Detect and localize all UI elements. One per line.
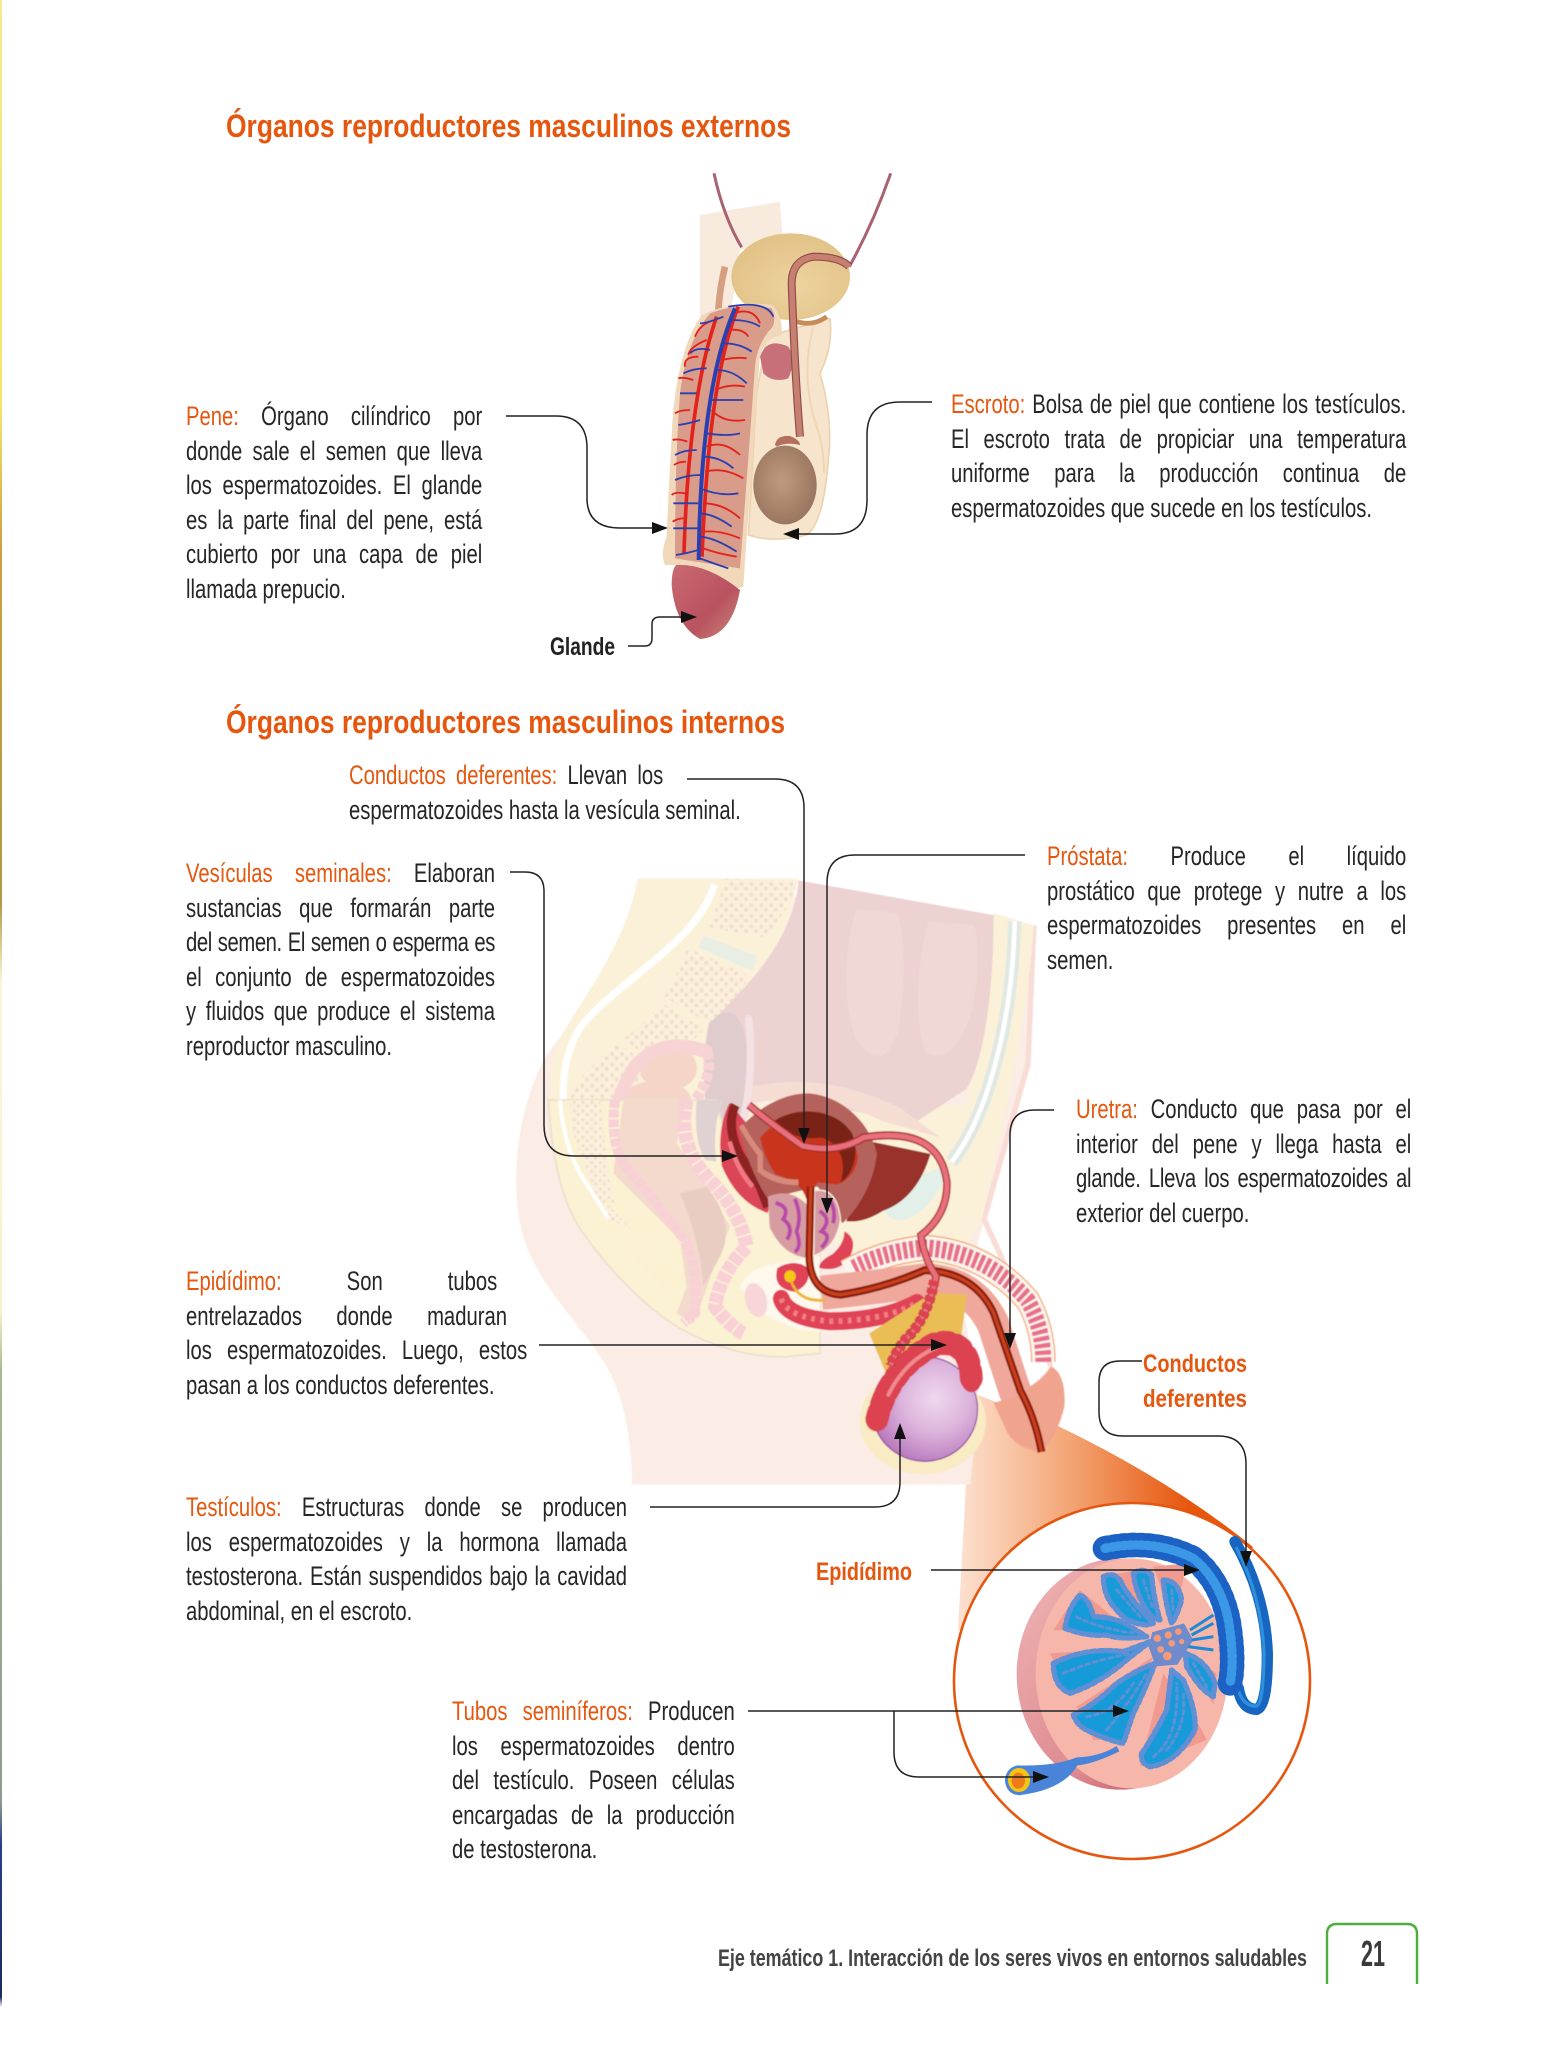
text: Conductos deferentes: espermatozoides hasta la vesícula seminal. xyxy=(349,795,741,825)
testis xyxy=(872,1357,978,1461)
page number tab xyxy=(1327,1924,1417,1984)
text: Testículos: Testículos: Estructuras donde se producen xyxy=(186,1492,627,1522)
text: Vesículas seminales xyxy=(186,858,495,1061)
seminal vesicle xyxy=(720,1103,776,1213)
text: Escroto: espermatozoides que sucede en los testículos. xyxy=(951,493,1372,523)
arrow: conductos deferentes detail xyxy=(1099,1361,1252,1567)
text: Pene: es la parte final del pene, está xyxy=(186,505,482,535)
corpora ladder xyxy=(846,1248,1043,1362)
label: Conductos deferentes xyxy=(1143,1350,1247,1413)
text: Pene: donde sale el semen que lleva xyxy=(186,436,482,466)
text: Testículos: abdominal, en el escroto. xyxy=(186,1596,412,1626)
text: Vesículas seminales: y fluidos que produce el sistema xyxy=(186,996,495,1026)
text: Testículos xyxy=(186,1492,627,1626)
lobule tubules xyxy=(1053,1570,1215,1767)
text: Uretra: glande. Lleva los espermatozoides al xyxy=(1076,1163,1411,1193)
text: Tubos seminíferos: los espermatozoides dentro xyxy=(452,1731,735,1761)
arrow: vesículas xyxy=(510,872,738,1162)
arrow: epidídimo detail xyxy=(931,1564,1200,1576)
title: internal organs: Órganos reproductores masculinos internos xyxy=(226,704,785,740)
text: Tubos seminíferos: del testículo. Poseen células xyxy=(452,1765,735,1795)
white catheter xyxy=(743,1019,751,1121)
bulb red xyxy=(819,1231,853,1269)
page number tab: 21 xyxy=(1361,1933,1385,1974)
urethra xyxy=(809,1187,1041,1452)
rete testis xyxy=(1150,1625,1192,1665)
label: Glande: Glande xyxy=(550,633,615,661)
text: Epidídimo: los espermatozoides. Luego, estos xyxy=(186,1335,527,1365)
text: Epidídimo: entrelazados donde maduran xyxy=(186,1301,507,1331)
epididymis blue xyxy=(1105,1545,1232,1683)
text: Tubos seminíferos: encargadas de la producción xyxy=(452,1800,735,1830)
text: Próstata: Próstata: Produce el líquido xyxy=(1047,841,1406,871)
text: Escroto: El escroto trata de propiciar una temperatura xyxy=(951,424,1406,454)
text: Pene: cubierto por una capa de piel xyxy=(186,539,482,569)
label: Conductos deferentes: Conductos xyxy=(1143,1350,1247,1378)
arrow: glande xyxy=(628,611,697,646)
efferent tube section xyxy=(1017,1746,1119,1795)
pubic bone xyxy=(846,1142,930,1222)
text: Testículos: los espermatozoides y la hormona llamada xyxy=(186,1527,627,1557)
text: Próstata: prostático que protege y nutre a los xyxy=(1047,876,1406,906)
arrow: escroto xyxy=(783,402,932,540)
arrow: tubos seminíferos xyxy=(748,1705,1129,1783)
text: Uretra: Uretra: Conducto que pasa por el xyxy=(1076,1094,1411,1124)
text: Vesículas seminales: Vesículas seminales: Elaboran xyxy=(186,858,495,888)
magnifier cone xyxy=(958,1395,1253,1681)
vas deferens blue xyxy=(1235,1542,1267,1709)
scrotum xyxy=(860,1368,986,1474)
penis shaft and urethra xyxy=(821,1280,1036,1440)
text: Vesículas seminales: del semen. El semen o esperma es xyxy=(186,927,495,957)
abdominal wall bands xyxy=(952,921,1015,1162)
label: Epidídimo: Epidídimo xyxy=(816,1558,912,1586)
text: Conductos deferentes xyxy=(349,760,741,825)
title: external organs: Órganos reproductores masculinos externos xyxy=(226,108,791,144)
arrow: pene xyxy=(506,416,668,534)
arrow: uretra xyxy=(1004,1110,1054,1349)
upper intestines xyxy=(640,1046,697,1091)
text: Escroto xyxy=(951,389,1406,523)
bladder xyxy=(739,1093,877,1223)
spine xyxy=(709,878,797,938)
text: Testículos: testosterona. Están suspendidos bajo la cavidad xyxy=(186,1561,627,1591)
lobule wedges xyxy=(1050,1563,1217,1767)
text: Epidídimo: Epidídimo: Son tubos xyxy=(186,1266,497,1296)
text: Escroto: uniforme para la producción continua de xyxy=(951,458,1406,488)
illustration: internal organs xyxy=(516,878,1065,1484)
arrow: epidídimo xyxy=(539,1339,947,1351)
illustration: external organs xyxy=(663,173,891,639)
prostate xyxy=(768,1193,809,1258)
label: Conductos deferentes: deferentes xyxy=(1143,1385,1247,1413)
lower pelvis detail xyxy=(548,1100,820,1357)
arrow: conductos deferentes xyxy=(687,779,810,1144)
text: Epidídimo: pasan a los conductos deferentes. xyxy=(186,1370,494,1400)
text: Uretra: interior del pene y llega hasta el xyxy=(1076,1129,1411,1159)
text: Uretra xyxy=(1076,1094,1411,1228)
connector arrows xyxy=(506,402,1252,1783)
page edge strip xyxy=(0,0,2,2048)
illustration: testicle cross-section xyxy=(1005,1542,1267,1795)
text: Conductos deferentes: Conductos deferentes: Llevan los xyxy=(349,760,663,790)
text: Vesículas seminales: sustancias que formarán parte xyxy=(186,893,495,923)
text: Epidídimo xyxy=(186,1266,527,1400)
yellow erectile fat xyxy=(869,1293,967,1374)
fat and spine band xyxy=(550,878,1034,1293)
text: Tubos seminíferos xyxy=(452,1696,735,1864)
text: Uretra: exterior del cuerpo. xyxy=(1076,1198,1249,1228)
text: Próstata: espermatozoides presentes en el xyxy=(1047,910,1406,940)
red lower bulb xyxy=(781,1299,917,1321)
text: Tubos seminíferos: Tubos seminíferos: Producen xyxy=(452,1696,735,1726)
text: Próstata xyxy=(1047,841,1406,975)
arrow: próstata xyxy=(821,855,1025,1214)
tubule mottling xyxy=(1063,1580,1207,1757)
footer text: Eje temático 1. Interacción de los seres vivos en entornos saludables xyxy=(718,1945,1307,1972)
arrow: testículos xyxy=(650,1423,906,1507)
text: Pene: Pene: Órgano cilíndrico por xyxy=(186,401,482,431)
skin silhouette xyxy=(516,878,1034,1484)
epididymis xyxy=(877,1343,971,1419)
text: Pene: llamada prepucio. xyxy=(186,574,346,604)
text: Escroto: Escroto: Bolsa de piel que contiene los testículos. xyxy=(951,389,1406,419)
text: Próstata: semen. xyxy=(1047,945,1113,975)
text: Vesículas seminales: el conjunto de espermatozoides xyxy=(186,962,495,992)
text: Vesículas seminales: reproductor masculino. xyxy=(186,1031,392,1061)
magnifier circle xyxy=(954,1503,1310,1859)
vas deferens xyxy=(749,1105,947,1366)
text: Tubos seminíferos: de testosterona. xyxy=(452,1834,597,1864)
text: Pene: los espermatozoides. El glande xyxy=(186,470,482,500)
abdominal cavity xyxy=(704,880,994,1154)
text: Pene xyxy=(186,401,482,604)
